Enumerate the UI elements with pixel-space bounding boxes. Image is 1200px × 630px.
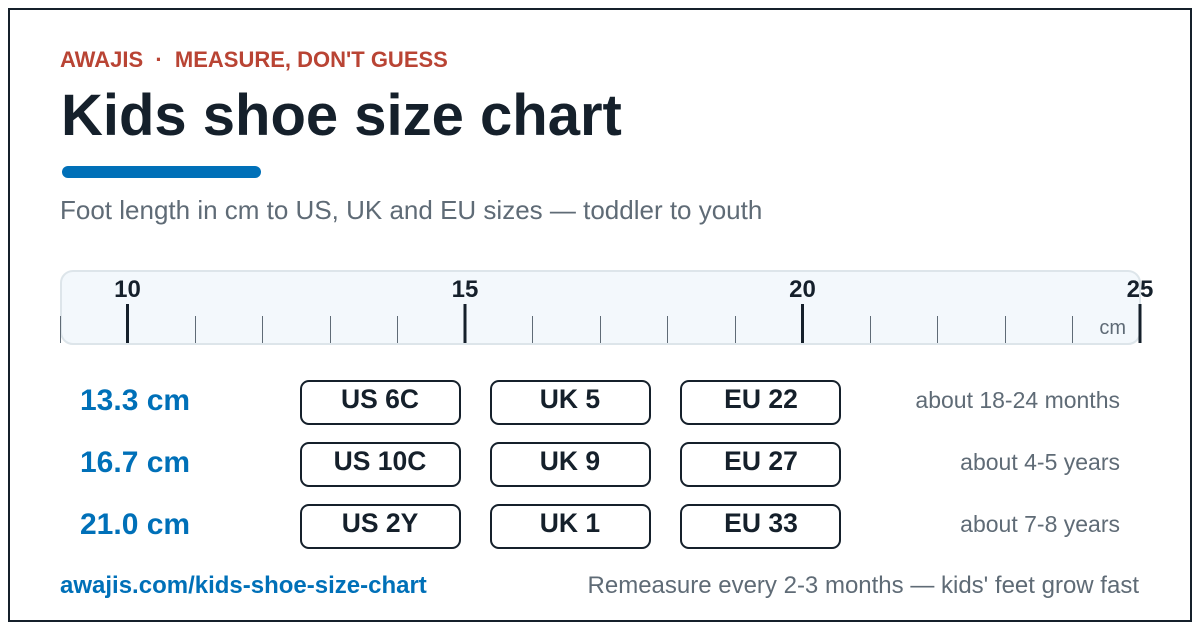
subtitle: Foot length in cm to US, UK and EU sizes — toddler to youth [60, 195, 762, 225]
size row 1: 13.3 cm [80, 384, 190, 417]
size row 2: about 4-5 years [960, 449, 1120, 475]
size row 1: UK 5 [540, 384, 600, 414]
size row 3 [80, 505, 1120, 548]
size row 3: about 7-8 years [960, 511, 1120, 537]
size row 2: US 10C [334, 446, 426, 476]
size row 2: UK 9 [540, 446, 600, 476]
eyebrow: AWAJIS · MEASURE, DON'T GUESS [60, 47, 448, 72]
ruler: 25 [1127, 276, 1153, 303]
size row 1 [80, 381, 1120, 424]
ruler [60, 271, 1153, 344]
ruler: 20 [789, 276, 816, 303]
size row 1: about 18-24 months [915, 387, 1120, 413]
size row 3: US 2Y [342, 508, 419, 538]
ruler: 10 [114, 276, 141, 303]
size row 1: EU 22 [724, 384, 798, 414]
size row 2: EU 27 [724, 446, 798, 476]
accent bar [62, 166, 261, 178]
size row 3: EU 33 [724, 508, 798, 538]
size row 2: 16.7 cm [80, 446, 190, 479]
size row 3: 21.0 cm [80, 508, 190, 541]
size row 2 [80, 443, 1120, 486]
footer link: awajis.com/kids-shoe-size-chart [60, 572, 427, 599]
ruler: cm [1099, 317, 1126, 339]
footer note: Remeasure every 2-3 months — kids' feet grow fast [588, 572, 1139, 599]
size row 1: US 6C [341, 384, 419, 414]
size row 3: UK 1 [540, 508, 600, 538]
title: Kids shoe size chart [61, 83, 622, 148]
ruler: 15 [452, 276, 478, 303]
